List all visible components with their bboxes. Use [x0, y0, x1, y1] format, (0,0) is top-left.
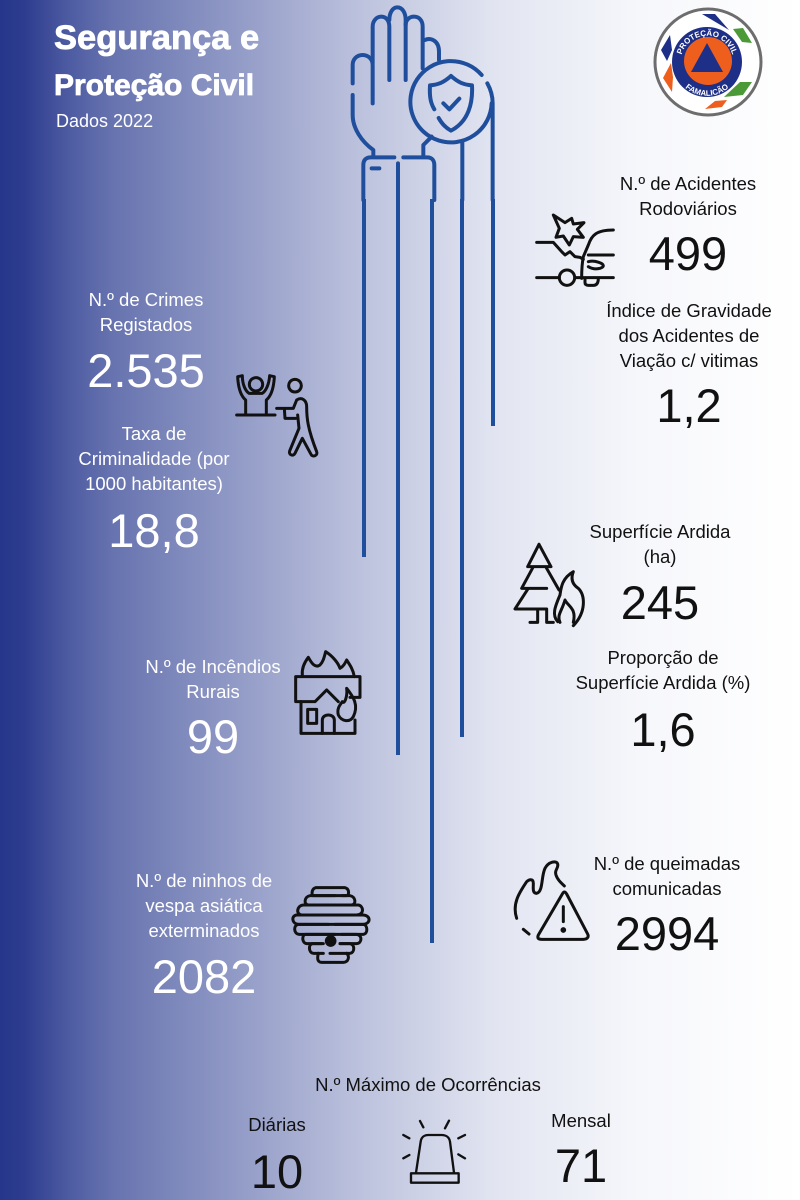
- stat: incêndios rurais: 99: [187, 710, 239, 763]
- logo: Proteção Civil Famalicão: PROTEÇÃO CIVIL: [676, 28, 736, 55]
- stat: ninhos de vespa asiática: vespa asiática: [145, 895, 263, 916]
- stat: índice de gravidade: 1,2: [656, 379, 722, 432]
- stat: taxa de criminalidade: Criminalidade (por: [78, 448, 230, 469]
- stat: acidentes rodoviários: 499: [649, 227, 727, 280]
- icon: burning tree: [515, 544, 583, 626]
- stat: índice de gravidade: Índice de Gravidade: [606, 300, 772, 321]
- stat: ninhos de vespa asiática: exterminados: [148, 920, 260, 941]
- stat: diárias: [248, 1114, 306, 1198]
- stat: queimadas comunicadas: N.º de queimadas: [594, 853, 740, 874]
- stat: proporção de superfície ardida: 1,6: [630, 703, 696, 756]
- title: Segurança e: [54, 19, 259, 57]
- stat: incêndios rurais: N.º de Incêndios: [145, 656, 281, 677]
- icon: alarm siren: [403, 1121, 465, 1183]
- stat: queimadas comunicadas: [594, 853, 740, 960]
- icon: car crash: [537, 215, 613, 285]
- icon: wasp nest: [293, 888, 369, 962]
- stat: mensal: Mensal: [551, 1110, 611, 1131]
- stat: índice de gravidade: [606, 300, 772, 432]
- icon: raised hand with shield and long stem lines: [353, 7, 493, 943]
- stat: superfície ardida: [590, 521, 731, 629]
- stat: diárias: 10: [251, 1145, 303, 1198]
- title: Proteção Civil: [54, 69, 254, 102]
- stat: superfície ardida: (ha): [644, 546, 676, 567]
- heading: máximo de ocorrências: N.º Máximo de Ocorrências: [315, 1074, 541, 1095]
- stat: crimes registados: N.º de Crimes: [89, 289, 203, 310]
- stat: taxa de criminalidade: Taxa de: [122, 423, 186, 444]
- stat: queimadas comunicadas: comunicadas: [612, 878, 722, 899]
- stat: taxa de criminalidade: 18,8: [108, 504, 200, 557]
- stat: ninhos de vespa asiática: [136, 870, 272, 1003]
- stat: crimes registados: 2.535: [87, 344, 205, 397]
- stat: incêndios rurais: [145, 656, 281, 763]
- stat: mensal: 71: [555, 1139, 607, 1192]
- stat: proporção de superfície ardida: Superfície Ardida (%): [576, 672, 750, 693]
- stat: crimes registados: Registados: [100, 314, 192, 335]
- stat: acidentes rodoviários: [620, 173, 756, 280]
- icon: fire warning: [515, 862, 588, 939]
- stat: superfície ardida: Superfície Ardida: [590, 521, 731, 542]
- stat: diárias: Diárias: [248, 1114, 306, 1135]
- stat: índice de gravidade: Viação c/ vitimas: [620, 350, 758, 371]
- icon: house on fire: [296, 652, 360, 733]
- logo: Proteção Civil Famalicão: FAMALICÃO: [686, 84, 728, 96]
- stat: taxa de criminalidade: 1000 habitantes): [85, 473, 223, 494]
- icon: armed robbery: [237, 376, 317, 456]
- stat: índice de gravidade: dos Acidentes de: [619, 325, 759, 346]
- subtitle: Dados 2022: [56, 111, 153, 131]
- stat: acidentes rodoviários: N.º de Acidentes: [620, 173, 756, 194]
- stat: proporção de superfície ardida: Proporção de: [607, 647, 719, 668]
- stat: proporção de superfície ardida: [576, 647, 750, 756]
- stat: crimes registados: [87, 289, 205, 397]
- stat: taxa de criminalidade: [78, 423, 230, 557]
- stat: mensal: [551, 1110, 611, 1192]
- stat: incêndios rurais: Rurais: [186, 681, 240, 702]
- title: [54, 19, 259, 102]
- stat: acidentes rodoviários: Rodoviários: [639, 198, 737, 219]
- stat: superfície ardida: 245: [621, 576, 699, 629]
- stat: queimadas comunicadas: 2994: [615, 907, 719, 960]
- logo: Proteção Civil Famalicão: [654, 8, 762, 116]
- stat: ninhos de vespa asiática: 2082: [152, 950, 256, 1003]
- stat: ninhos de vespa asiática: N.º de ninhos de: [136, 870, 272, 891]
